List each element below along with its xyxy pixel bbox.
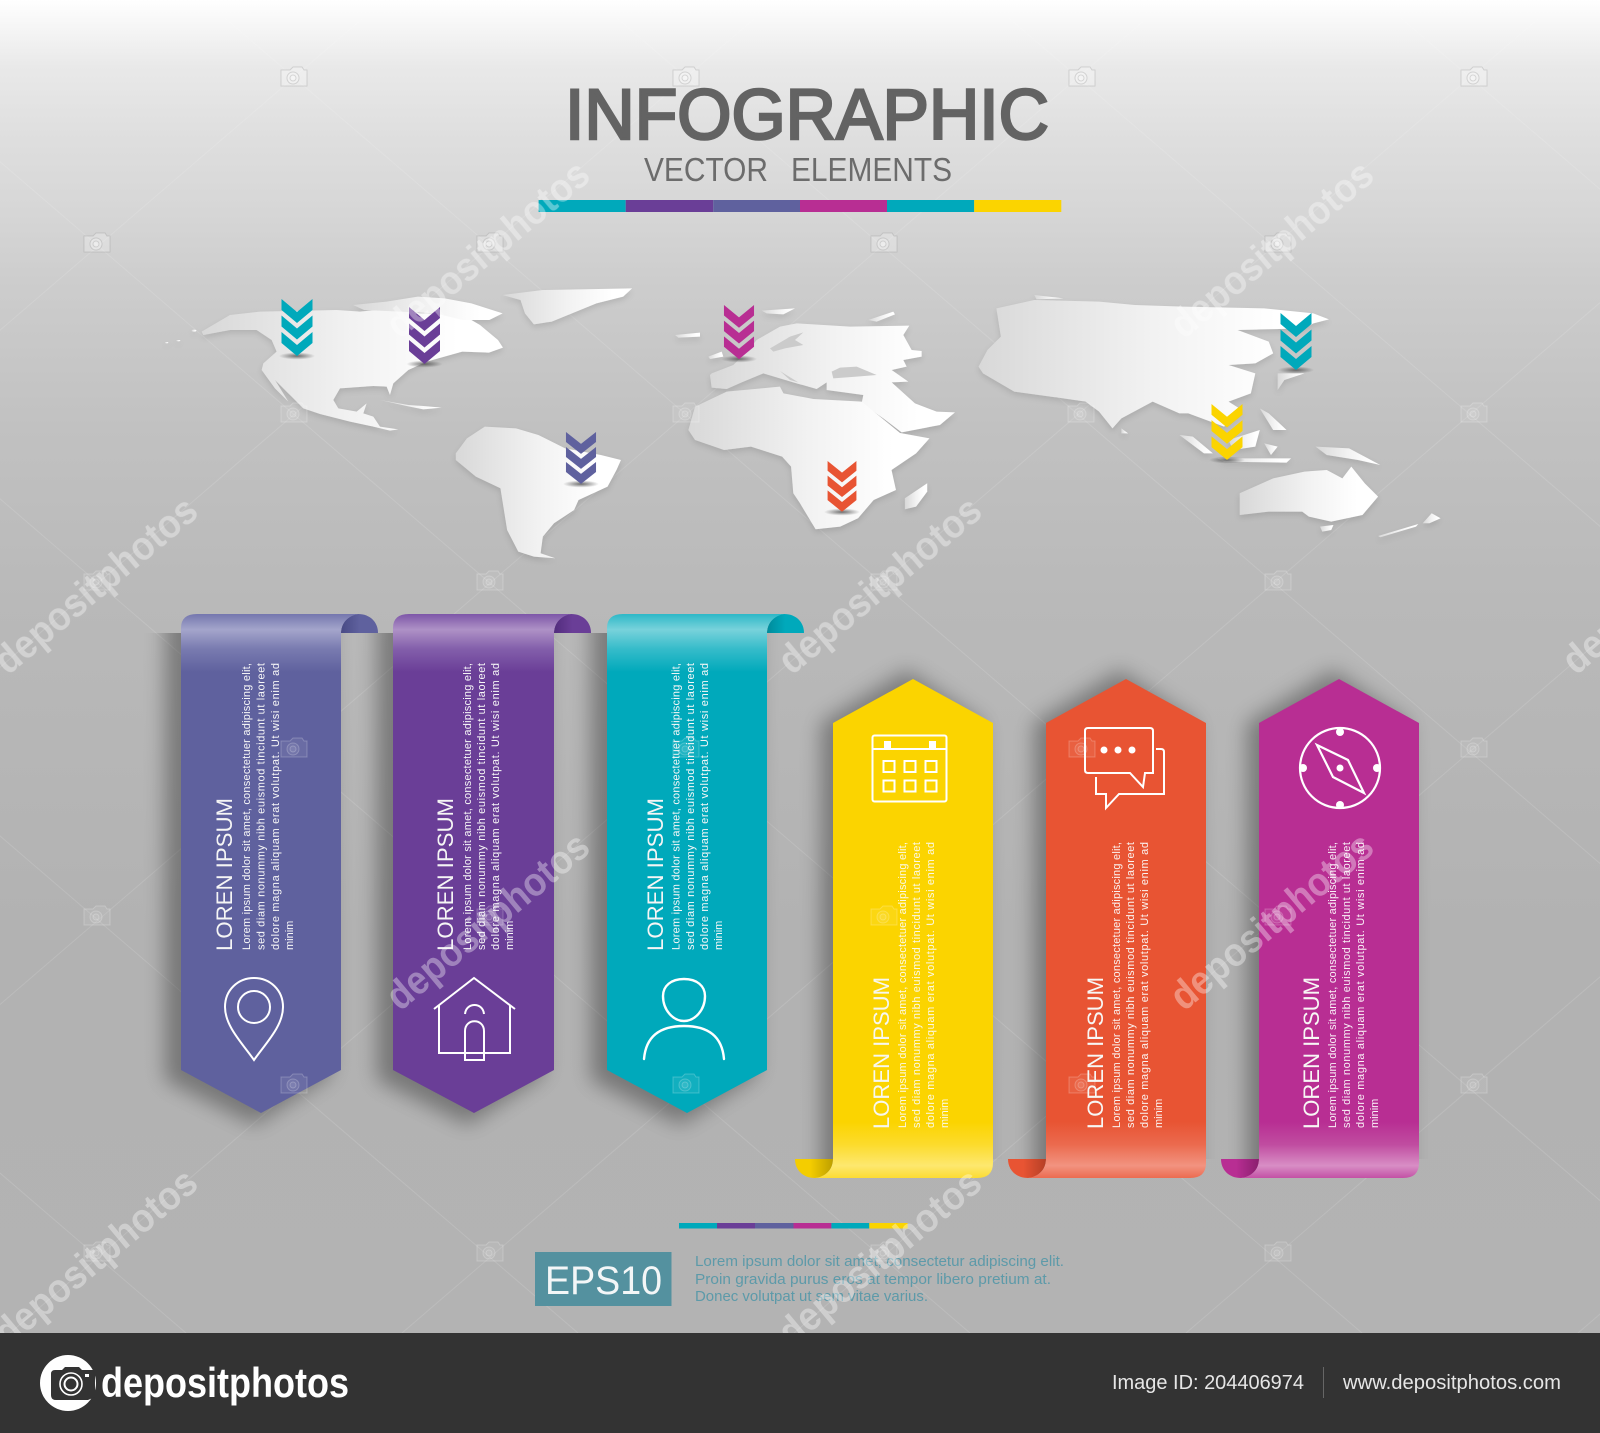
bottom colour bar — [679, 1223, 908, 1228]
logo wordmark: depositphotos — [101, 1359, 349, 1406]
ribbon 3: teal, person — [591, 600, 804, 1125]
body text: Lorem ipsum dolor sit amet, consectetuer adipiscing elit, — [1327, 842, 1339, 1128]
title: ELEMENTS — [791, 151, 952, 188]
body text: minim — [1369, 1099, 1381, 1128]
map: inland seas — [770, 332, 877, 382]
body text — [1111, 842, 1165, 1128]
ribbon 4: yellow, calendar — [795, 670, 993, 1190]
body text — [462, 663, 516, 950]
body text: Lorem ipsum dolor sit amet, consectetuer adipiscing elit, — [462, 663, 474, 950]
map: africa, asia, oceania — [688, 295, 1441, 537]
icon: calendar — [872, 736, 946, 802]
watermark cameras — [84, 67, 1487, 1261]
footnote text: Donec volutpat ut sem vitae varius. — [695, 1289, 928, 1305]
heading: LOREN IPSUM — [212, 798, 237, 951]
body text: minim — [1153, 1099, 1165, 1128]
icon: home — [434, 978, 515, 1060]
title colour bar — [539, 200, 1061, 212]
map pin: teal, north america — [279, 299, 315, 360]
body text: minim — [504, 921, 516, 950]
body text: Lorem ipsum dolor sit amet, consectetuer adipiscing elit, — [897, 842, 909, 1128]
title: INFOGRAPHIC — [565, 76, 1049, 155]
footnote text: Lorem ipsum dolor sit amet, consectetur adipiscing elit. — [695, 1254, 1064, 1270]
diagonal watermark text: depositphotos — [1162, 152, 1382, 347]
heading: LOREN IPSUM — [1299, 977, 1324, 1129]
website: www.depositphotos.com — [1342, 1372, 1561, 1394]
map pin: indigo, south america — [563, 432, 599, 488]
body text: sed diam nonummy nibh euismod tincidunt ut laoreet — [685, 663, 697, 950]
body text: minim — [713, 921, 725, 950]
body text: sed diam nonummy nibh euismod tincidunt ut laoreet — [1125, 842, 1137, 1128]
footnote text: Proin gravida purus eros at tempor libero pretium at. — [695, 1272, 1051, 1288]
body text: sed diam nonummy nibh euismod tincidunt ut laoreet — [476, 663, 488, 950]
body text: dolore magna aliquam erat volutpat. Ut wisi enim ad — [490, 663, 502, 950]
body text: sed diam nonummy nibh euismod tincidunt ut laoreet — [256, 663, 268, 950]
body text: minim — [284, 921, 296, 950]
footnote text — [695, 1254, 1064, 1305]
diagonal watermark text: depositphotos — [770, 1160, 990, 1355]
body text — [897, 842, 951, 1128]
map pin: magenta, europe — [721, 305, 757, 362]
body text: dolore magna aliquam erat volutpat. Ut wisi enim ad — [925, 842, 937, 1128]
map: north america — [165, 308, 503, 431]
EPS10 badge: EPS10 — [545, 1259, 662, 1303]
body text: sed diam nonummy nibh euismod tincidunt ut laoreet — [911, 842, 923, 1128]
body text — [241, 663, 296, 950]
heading: LOREN IPSUM — [643, 798, 668, 951]
ribbon 6: magenta, compass — [1221, 670, 1419, 1190]
title — [565, 76, 1049, 188]
watermark lattice — [0, 414, 1600, 1333]
image id: Image ID: 204406974 — [1112, 1372, 1304, 1394]
body text: minim — [939, 1099, 951, 1128]
heading: LOREN IPSUM — [433, 798, 458, 951]
map pin: teal, east asia — [1278, 313, 1314, 374]
diagonal watermark text: depositphotos — [378, 152, 598, 347]
map pin: orange, africa — [824, 461, 860, 516]
icon: person — [644, 979, 724, 1059]
body text: Lorem ipsum dolor sit amet, consectetuer adipiscing elit, — [1111, 842, 1123, 1128]
icon: depositphotos logo — [40, 1355, 96, 1411]
ribbon 1: indigo, location — [165, 600, 378, 1125]
world map — [165, 288, 1441, 558]
footer bar — [0, 1333, 1600, 1433]
map pin: purple, north america — [406, 307, 442, 368]
diagonal watermark text: depositphotos — [378, 824, 598, 1019]
body text: Lorem ipsum dolor sit amet, consectetuer adipiscing elit, — [241, 663, 253, 950]
body text: sed diam nonummy nibh euismod tincidunt ut laoreet — [1341, 842, 1353, 1128]
diagonal watermark text: depositphotos — [770, 488, 990, 683]
body text — [1327, 842, 1381, 1128]
icon: location pin — [225, 978, 283, 1060]
map: europe and middle east — [675, 308, 955, 432]
body text: dolore magna aliquam erat volutpat. Ut wisi enim ad — [1355, 842, 1367, 1128]
icon: chat bubbles — [1085, 728, 1164, 808]
title: VECTOR — [644, 151, 768, 188]
ribbon 2: purple, home — [377, 600, 591, 1125]
heading: LOREN IPSUM — [1083, 977, 1108, 1129]
icon: compass — [1299, 728, 1381, 809]
body text: Lorem ipsum dolor sit amet, consectetuer adipiscing elit, — [670, 663, 682, 950]
diagonal watermark text: depositphotos — [1162, 824, 1382, 1019]
body text: dolore magna aliquam erat volutpat. Ut wisi enim ad — [699, 663, 711, 950]
body text: dolore magna aliquam erat volutpat. Ut wisi enim ad — [1139, 842, 1151, 1128]
body text: dolore magna aliquam erat volutpat. Ut wisi enim ad — [270, 663, 282, 950]
map pin: yellow, south east asia — [1209, 404, 1245, 464]
map: arctic, greenland, caribbean, south america — [353, 288, 632, 558]
heading: LOREN IPSUM — [869, 977, 894, 1129]
body text — [670, 663, 725, 950]
ribbon 5: orange, chat — [1008, 670, 1206, 1190]
